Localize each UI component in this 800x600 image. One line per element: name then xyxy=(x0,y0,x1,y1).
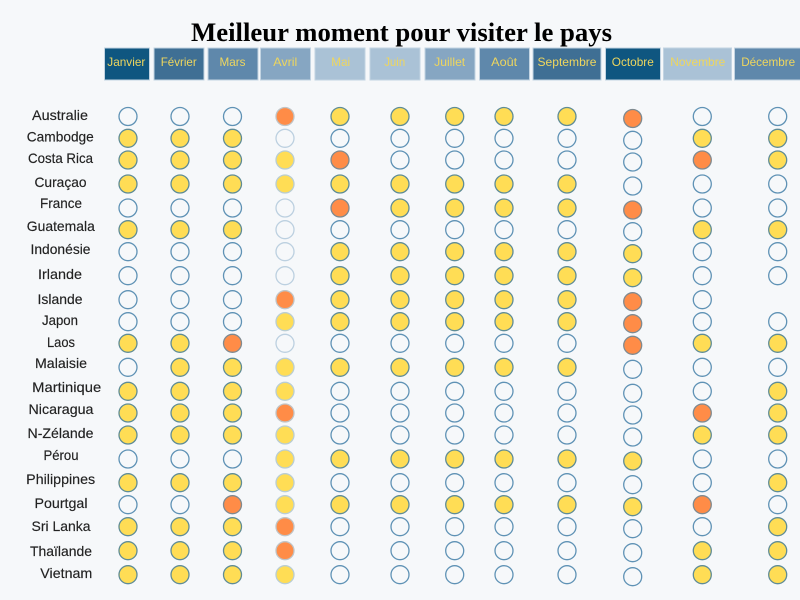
row: Costa Rica: Costa Rica xyxy=(28,150,93,166)
month: Décembre xyxy=(734,48,800,80)
row: Australie xyxy=(32,107,787,128)
row: Laos: Laos xyxy=(47,334,75,350)
row: Nicaragua xyxy=(28,401,787,424)
month: Août: Août xyxy=(491,55,518,69)
month: Juillet: Juillet xyxy=(434,55,466,69)
row: Martinique xyxy=(32,379,787,402)
row: France: France xyxy=(40,195,82,211)
row: Pérou xyxy=(44,447,787,470)
row: Irlande: Irlande xyxy=(38,266,82,282)
row: Sri Lanka xyxy=(32,518,787,538)
month: Octobre: Octobre xyxy=(612,55,654,69)
row: Pourtgal xyxy=(34,495,787,516)
month: Mars xyxy=(208,48,258,80)
row: Japon xyxy=(42,312,787,333)
month: Juillet xyxy=(425,48,475,80)
row: N-Zélande xyxy=(28,425,787,446)
row: Guatemala xyxy=(27,218,787,241)
month: Novembre: Novembre xyxy=(670,55,726,69)
row: Sri Lanka: Sri Lanka xyxy=(32,518,91,534)
row: Malaisie: Malaisie xyxy=(35,355,87,371)
row: Islande xyxy=(38,291,711,311)
month: Avril xyxy=(260,48,310,80)
row: Nicaragua: Nicaragua xyxy=(28,401,94,417)
month: Mars: Mars xyxy=(220,55,246,69)
row: Guatemala: Guatemala xyxy=(27,218,95,234)
row: Thaïlande xyxy=(30,542,787,562)
row: Vietnam: Vietnam xyxy=(40,565,92,581)
row: Curaçao: Curaçao xyxy=(34,174,87,190)
month: Mai: Mai xyxy=(331,55,350,69)
row: Vietnam xyxy=(40,565,787,586)
row: Philippines xyxy=(26,471,787,494)
month: Août xyxy=(480,48,530,80)
month: Septembre: Septembre xyxy=(538,55,597,69)
row: Curaçao xyxy=(34,174,787,195)
row: Japon: Japon xyxy=(42,312,78,328)
month: Juin xyxy=(370,48,420,80)
month: Novembre xyxy=(664,48,732,80)
row: Indonésie: Indonésie xyxy=(30,241,91,257)
month: Janvier: Janvier xyxy=(107,55,145,69)
row: Philippines: Philippines xyxy=(26,471,95,487)
row: Laos xyxy=(47,334,787,354)
month: Mai xyxy=(315,48,365,80)
month: Septembre xyxy=(533,48,601,80)
month: Octobre xyxy=(606,48,660,80)
row: Thaïlande: Thaïlande xyxy=(30,543,92,559)
month: Février xyxy=(154,48,204,80)
month: Janvier xyxy=(104,48,150,80)
row: Pourtgal: Pourtgal xyxy=(34,495,88,511)
row: Martinique: Martinique xyxy=(32,379,101,395)
month: Juin: Juin xyxy=(384,55,405,69)
month: Avril: Avril xyxy=(273,55,297,69)
row: France xyxy=(40,195,787,219)
row: Islande: Islande xyxy=(38,291,83,307)
row: Cambodge: Cambodge xyxy=(27,128,94,144)
month header row xyxy=(104,48,800,80)
row: Pérou: Pérou xyxy=(44,447,78,463)
title: Meilleur moment pour visiter le pays xyxy=(191,18,612,47)
month: Février: Février xyxy=(161,55,197,69)
row: Indonésie xyxy=(30,241,787,263)
row: Costa Rica xyxy=(28,150,787,171)
row: Australie: Australie xyxy=(32,107,88,123)
month: Décembre: Décembre xyxy=(741,55,796,69)
row: Malaisie xyxy=(35,355,787,378)
row: N-Zélande: N-Zélande xyxy=(28,425,94,441)
row: Cambodge xyxy=(27,128,787,149)
row: Irlande xyxy=(38,266,787,287)
